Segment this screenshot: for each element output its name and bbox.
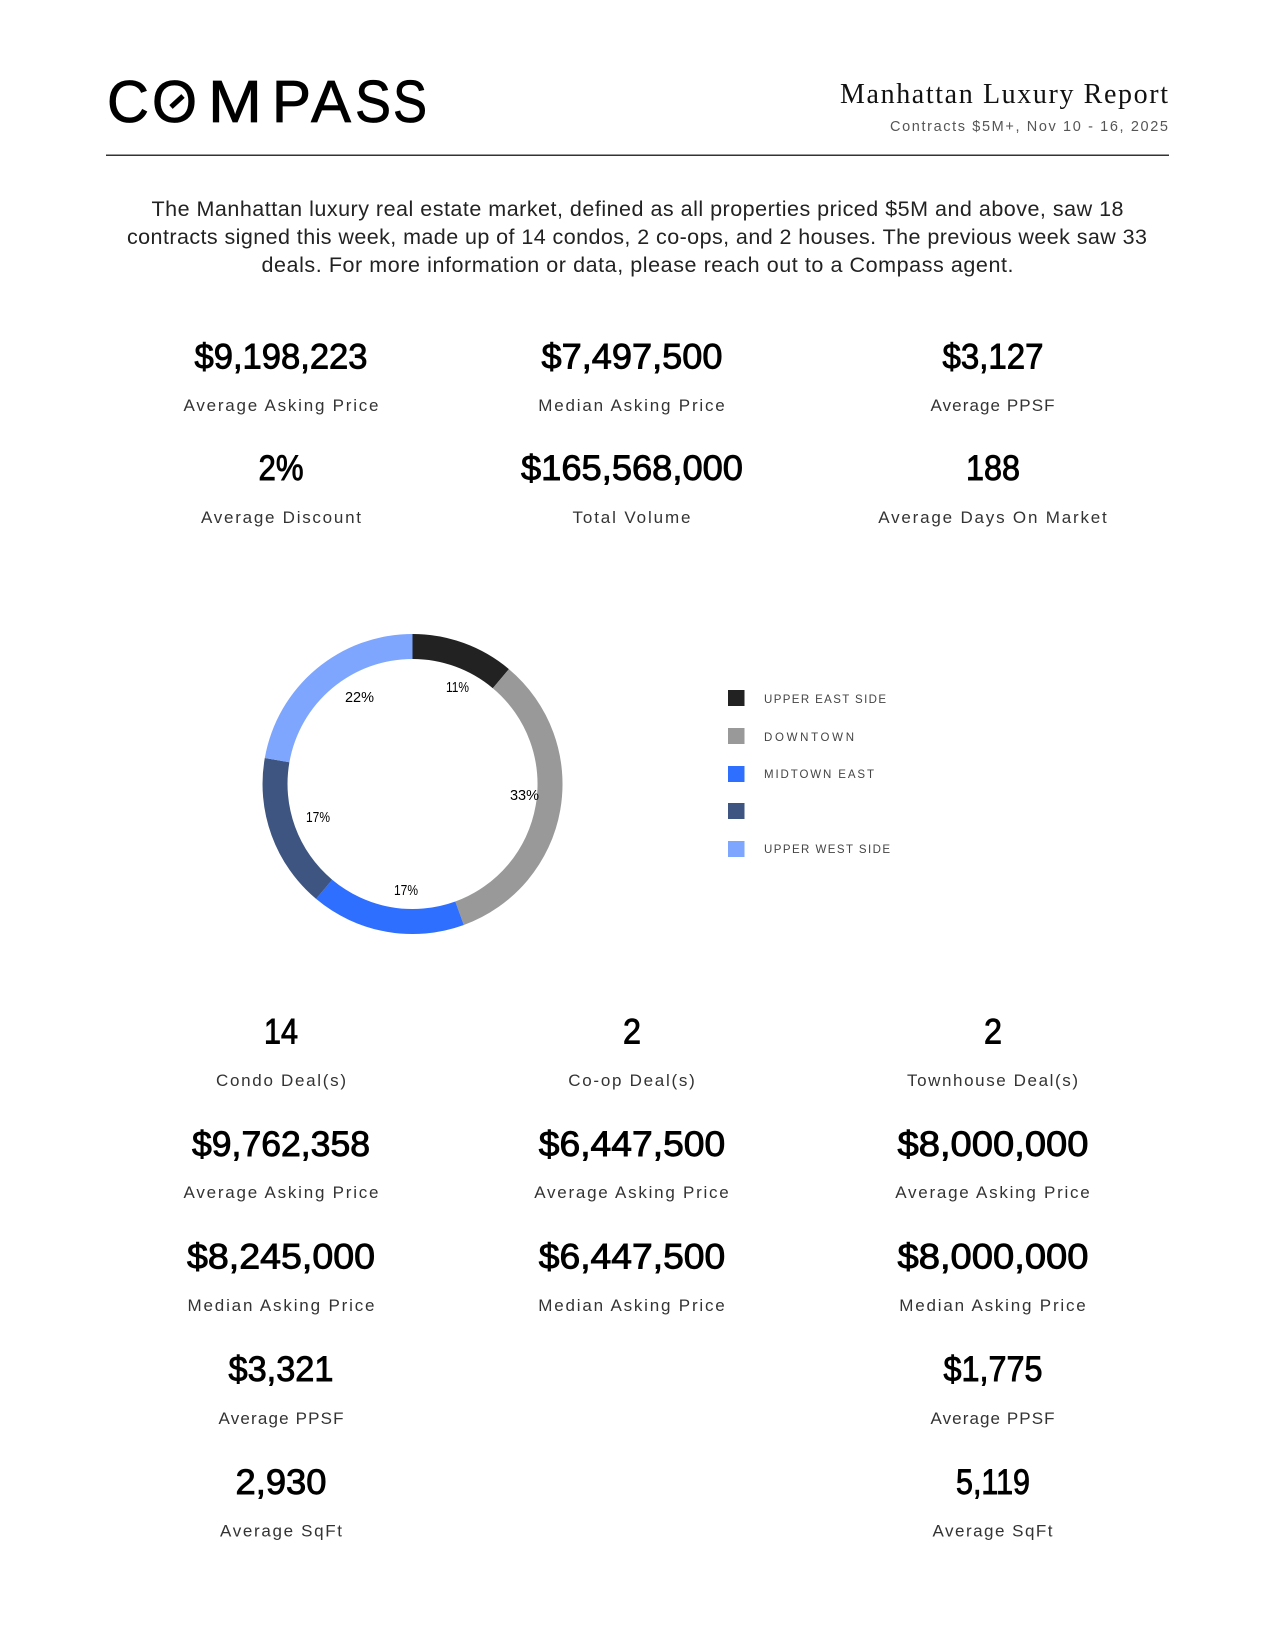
panel: townhouse statistics: $1,775: [944, 1350, 1042, 1389]
stat: median asking price: Median Asking Price: [538, 396, 725, 415]
legend: MIDTOWN EAST: [764, 769, 874, 781]
stat: total volume: $165,568,000: [521, 449, 743, 488]
stat: average discount: 2%: [258, 449, 304, 488]
legend: [728, 690, 890, 857]
logo: Compass: P: [272, 68, 311, 135]
stat: average asking price: [184, 338, 378, 415]
panel: co-op statistics: [534, 1012, 729, 1315]
donut chart: deals by neighborhood: 33%: [510, 787, 539, 804]
stat: average discount: [201, 449, 361, 527]
panel: townhouse statistics: 2: [984, 1012, 1002, 1052]
panel: townhouse statistics: Townhouse Deal(s): [907, 1071, 1078, 1090]
panel: co-op statistics: Median Asking Price: [538, 1296, 725, 1315]
panel: co-op statistics: $6,447,500: [539, 1238, 725, 1276]
donut chart: deals by neighborhood: 17%: [394, 882, 418, 899]
panel: townhouse statistics: Average Asking Price: [895, 1183, 1090, 1202]
logo: Compass: C: [107, 68, 149, 135]
stat: average PPSF: Average PPSF: [930, 396, 1054, 415]
report subtitle: Contracts $5M+, Nov 10 - 16, 2025: [890, 119, 1168, 135]
panel: co-op statistics: Average Asking Price: [534, 1183, 729, 1202]
donut chart: deals by neighborhood: 11%: [446, 679, 469, 696]
logo: Compass: [107, 68, 427, 135]
logo: Compass: A: [311, 68, 351, 135]
panel: condo statistics: $9,762,358: [192, 1125, 370, 1164]
report title: Manhattan Luxury Report: [840, 79, 1168, 110]
panel: condo statistics: Average PPSF: [218, 1409, 344, 1428]
intro paragraph: [127, 197, 1147, 277]
stat: average days on market: [878, 449, 1107, 527]
intro paragraph: deals. For more information or data, please reach out to a Compass agent.: [262, 253, 1014, 277]
panel: townhouse statistics: 5,119: [956, 1463, 1030, 1502]
stat: average asking price: Average Asking Price: [184, 396, 378, 415]
intro paragraph: The Manhattan luxury real estate market, defined as all properties priced $5M and above, saw 18: [152, 197, 1124, 221]
panel: co-op statistics: 2: [623, 1012, 641, 1052]
stat: average days on market: 188: [966, 449, 1020, 488]
stat: average discount: Average Discount: [201, 508, 361, 527]
panel: townhouse statistics: $8,000,000: [898, 1125, 1088, 1164]
legend: UPPER EAST SIDE: [764, 694, 886, 706]
stat: median asking price: $7,497,500: [542, 338, 722, 376]
logo: Compass: S: [393, 68, 427, 135]
donut chart: deals by neighborhood: 22%: [345, 689, 374, 706]
panel: condo statistics: 14: [264, 1012, 298, 1052]
stat: average PPSF: [930, 338, 1054, 415]
logo: Compass: S: [355, 68, 391, 135]
panel: townhouse statistics: Average PPSF: [930, 1409, 1054, 1428]
logo: Compass: M: [208, 68, 262, 135]
panel: condo statistics: Average Asking Price: [184, 1183, 378, 1202]
panel: townhouse statistics: $8,000,000: [898, 1238, 1088, 1276]
panel: condo statistics: $3,321: [228, 1350, 334, 1389]
panel: townhouse statistics: Average SqFt: [932, 1522, 1053, 1540]
stat: average PPSF: $3,127: [942, 338, 1044, 376]
panel: townhouse statistics: [895, 1012, 1090, 1540]
stat: average asking price: $9,198,223: [194, 338, 368, 376]
intro paragraph: contracts signed this week, made up of 14 condos, 2 co-ops, and 2 houses. The previous week saw 33: [127, 225, 1147, 249]
panel: condo statistics: Condo Deal(s): [216, 1071, 346, 1090]
panel: condo statistics: $8,245,000: [187, 1238, 375, 1276]
panel: co-op statistics: Co-op Deal(s): [568, 1071, 695, 1090]
panel: condo statistics: Average SqFt: [220, 1522, 342, 1540]
stat: total volume: [521, 449, 743, 527]
legend: DOWNTOWN: [764, 732, 854, 744]
panel: co-op statistics: $6,447,500: [539, 1125, 725, 1164]
stat: average days on market: Average Days On Market: [878, 508, 1107, 527]
panel: condo statistics: [184, 1012, 378, 1540]
stat: total volume: Total Volume: [572, 508, 690, 527]
donut chart: deals by neighborhood: 17%: [306, 809, 330, 826]
panel: condo statistics: Median Asking Price: [188, 1296, 374, 1315]
stat: median asking price: [538, 338, 725, 415]
donut chart: deals by neighborhood: [263, 634, 563, 934]
panel: summary statistics: [184, 338, 1107, 527]
logo: Compass: O: [152, 68, 197, 135]
panel: condo statistics: 2,930: [236, 1463, 326, 1502]
panel: townhouse statistics: Median Asking Price: [899, 1296, 1086, 1315]
legend: UPPER WEST SIDE: [764, 844, 890, 856]
